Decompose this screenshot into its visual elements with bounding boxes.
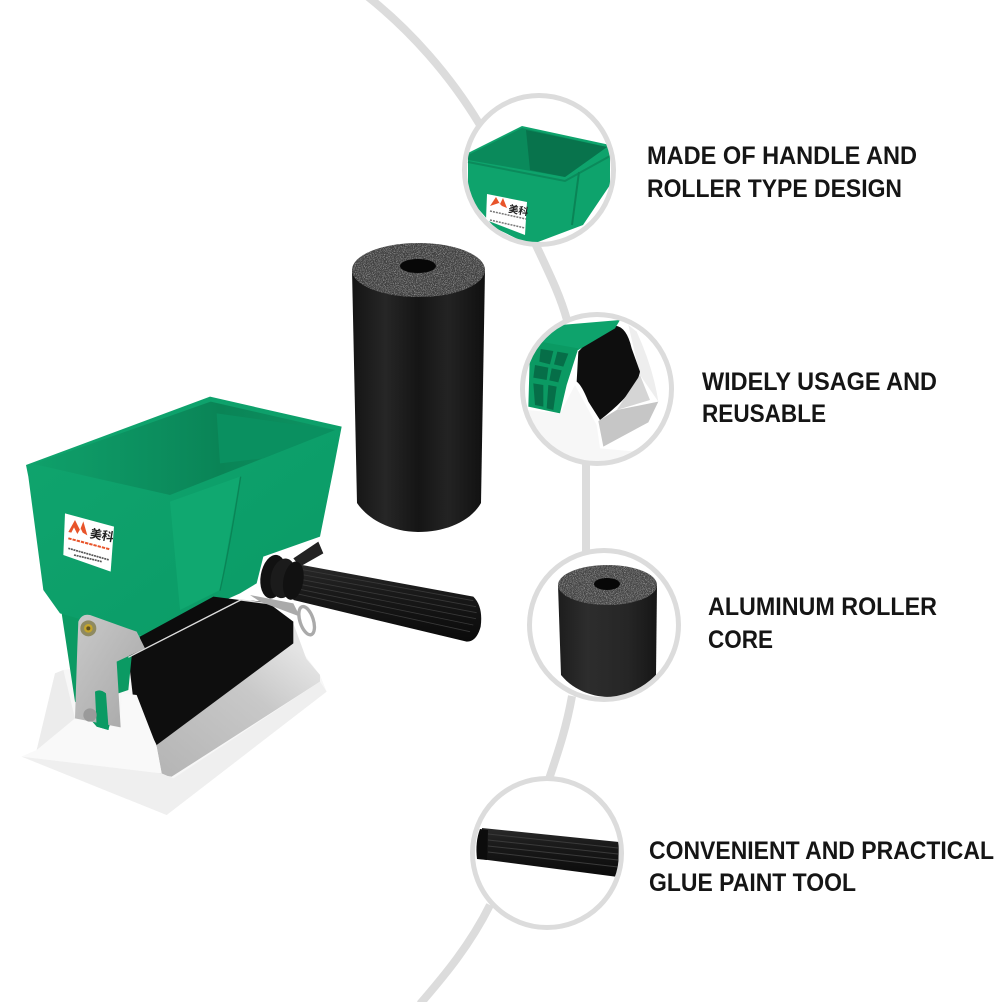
base left face [37, 670, 75, 750]
seam [220, 477, 241, 591]
connecting curved line [367, 0, 586, 1002]
text: usage: REUSABLE [702, 400, 826, 428]
text: handle and roller design [647, 142, 917, 203]
text: roller core: ALUMINUM ROLLER [708, 593, 937, 621]
gray slope [617, 375, 650, 410]
text: handle and roller design: MADE OF HANDLE AND [647, 142, 917, 170]
front face shine [170, 477, 240, 610]
white base [558, 412, 560, 414]
lower screw [83, 708, 97, 722]
product: tall foam roller [352, 243, 485, 532]
bolt [80, 620, 96, 636]
front lip [22, 682, 327, 815]
green top band [538, 320, 620, 352]
text: roller core: CORE [708, 626, 773, 654]
label sticker: 美科 [89, 526, 115, 544]
detail circle 1: hopper [464, 96, 614, 245]
tray [155, 643, 320, 777]
white wall right [628, 325, 658, 402]
text: handle and roller design: ROLLER TYPE DESIGN [647, 175, 902, 203]
base [22, 640, 327, 815]
wing nut ring [296, 605, 318, 637]
detail circle 2: roller underside [522, 314, 672, 478]
detail circle 3: short roller [530, 550, 678, 700]
green lower body [62, 613, 143, 730]
lower shadow seam [128, 597, 240, 657]
hopper opening [33, 402, 335, 495]
sticker [486, 194, 529, 235]
product: glue roller applicator [22, 397, 481, 815]
front base wedge [75, 693, 162, 773]
black roller [577, 326, 640, 420]
detail circle 4: handle [472, 778, 622, 928]
text: usage: WIDELY USAGE AND [702, 368, 937, 396]
clamp [293, 542, 323, 567]
metal bracket [75, 615, 145, 727]
slot [95, 690, 109, 730]
collar [257, 553, 307, 601]
handle collar [476, 829, 488, 860]
back wall [293, 623, 320, 675]
roller [128, 600, 293, 745]
hopper outer [26, 397, 342, 637]
label sticker [63, 513, 115, 572]
text: roller core [708, 593, 937, 654]
tray [598, 402, 658, 447]
text: glue paint tool [649, 837, 994, 897]
text: usage [702, 368, 937, 428]
interior back wall [217, 413, 335, 463]
green ribs [528, 342, 578, 413]
handle [293, 563, 481, 642]
bracket strap [250, 595, 300, 617]
sticker: 美科 [507, 202, 529, 218]
text: glue paint tool: GLUE PAINT TOOL [649, 869, 856, 897]
